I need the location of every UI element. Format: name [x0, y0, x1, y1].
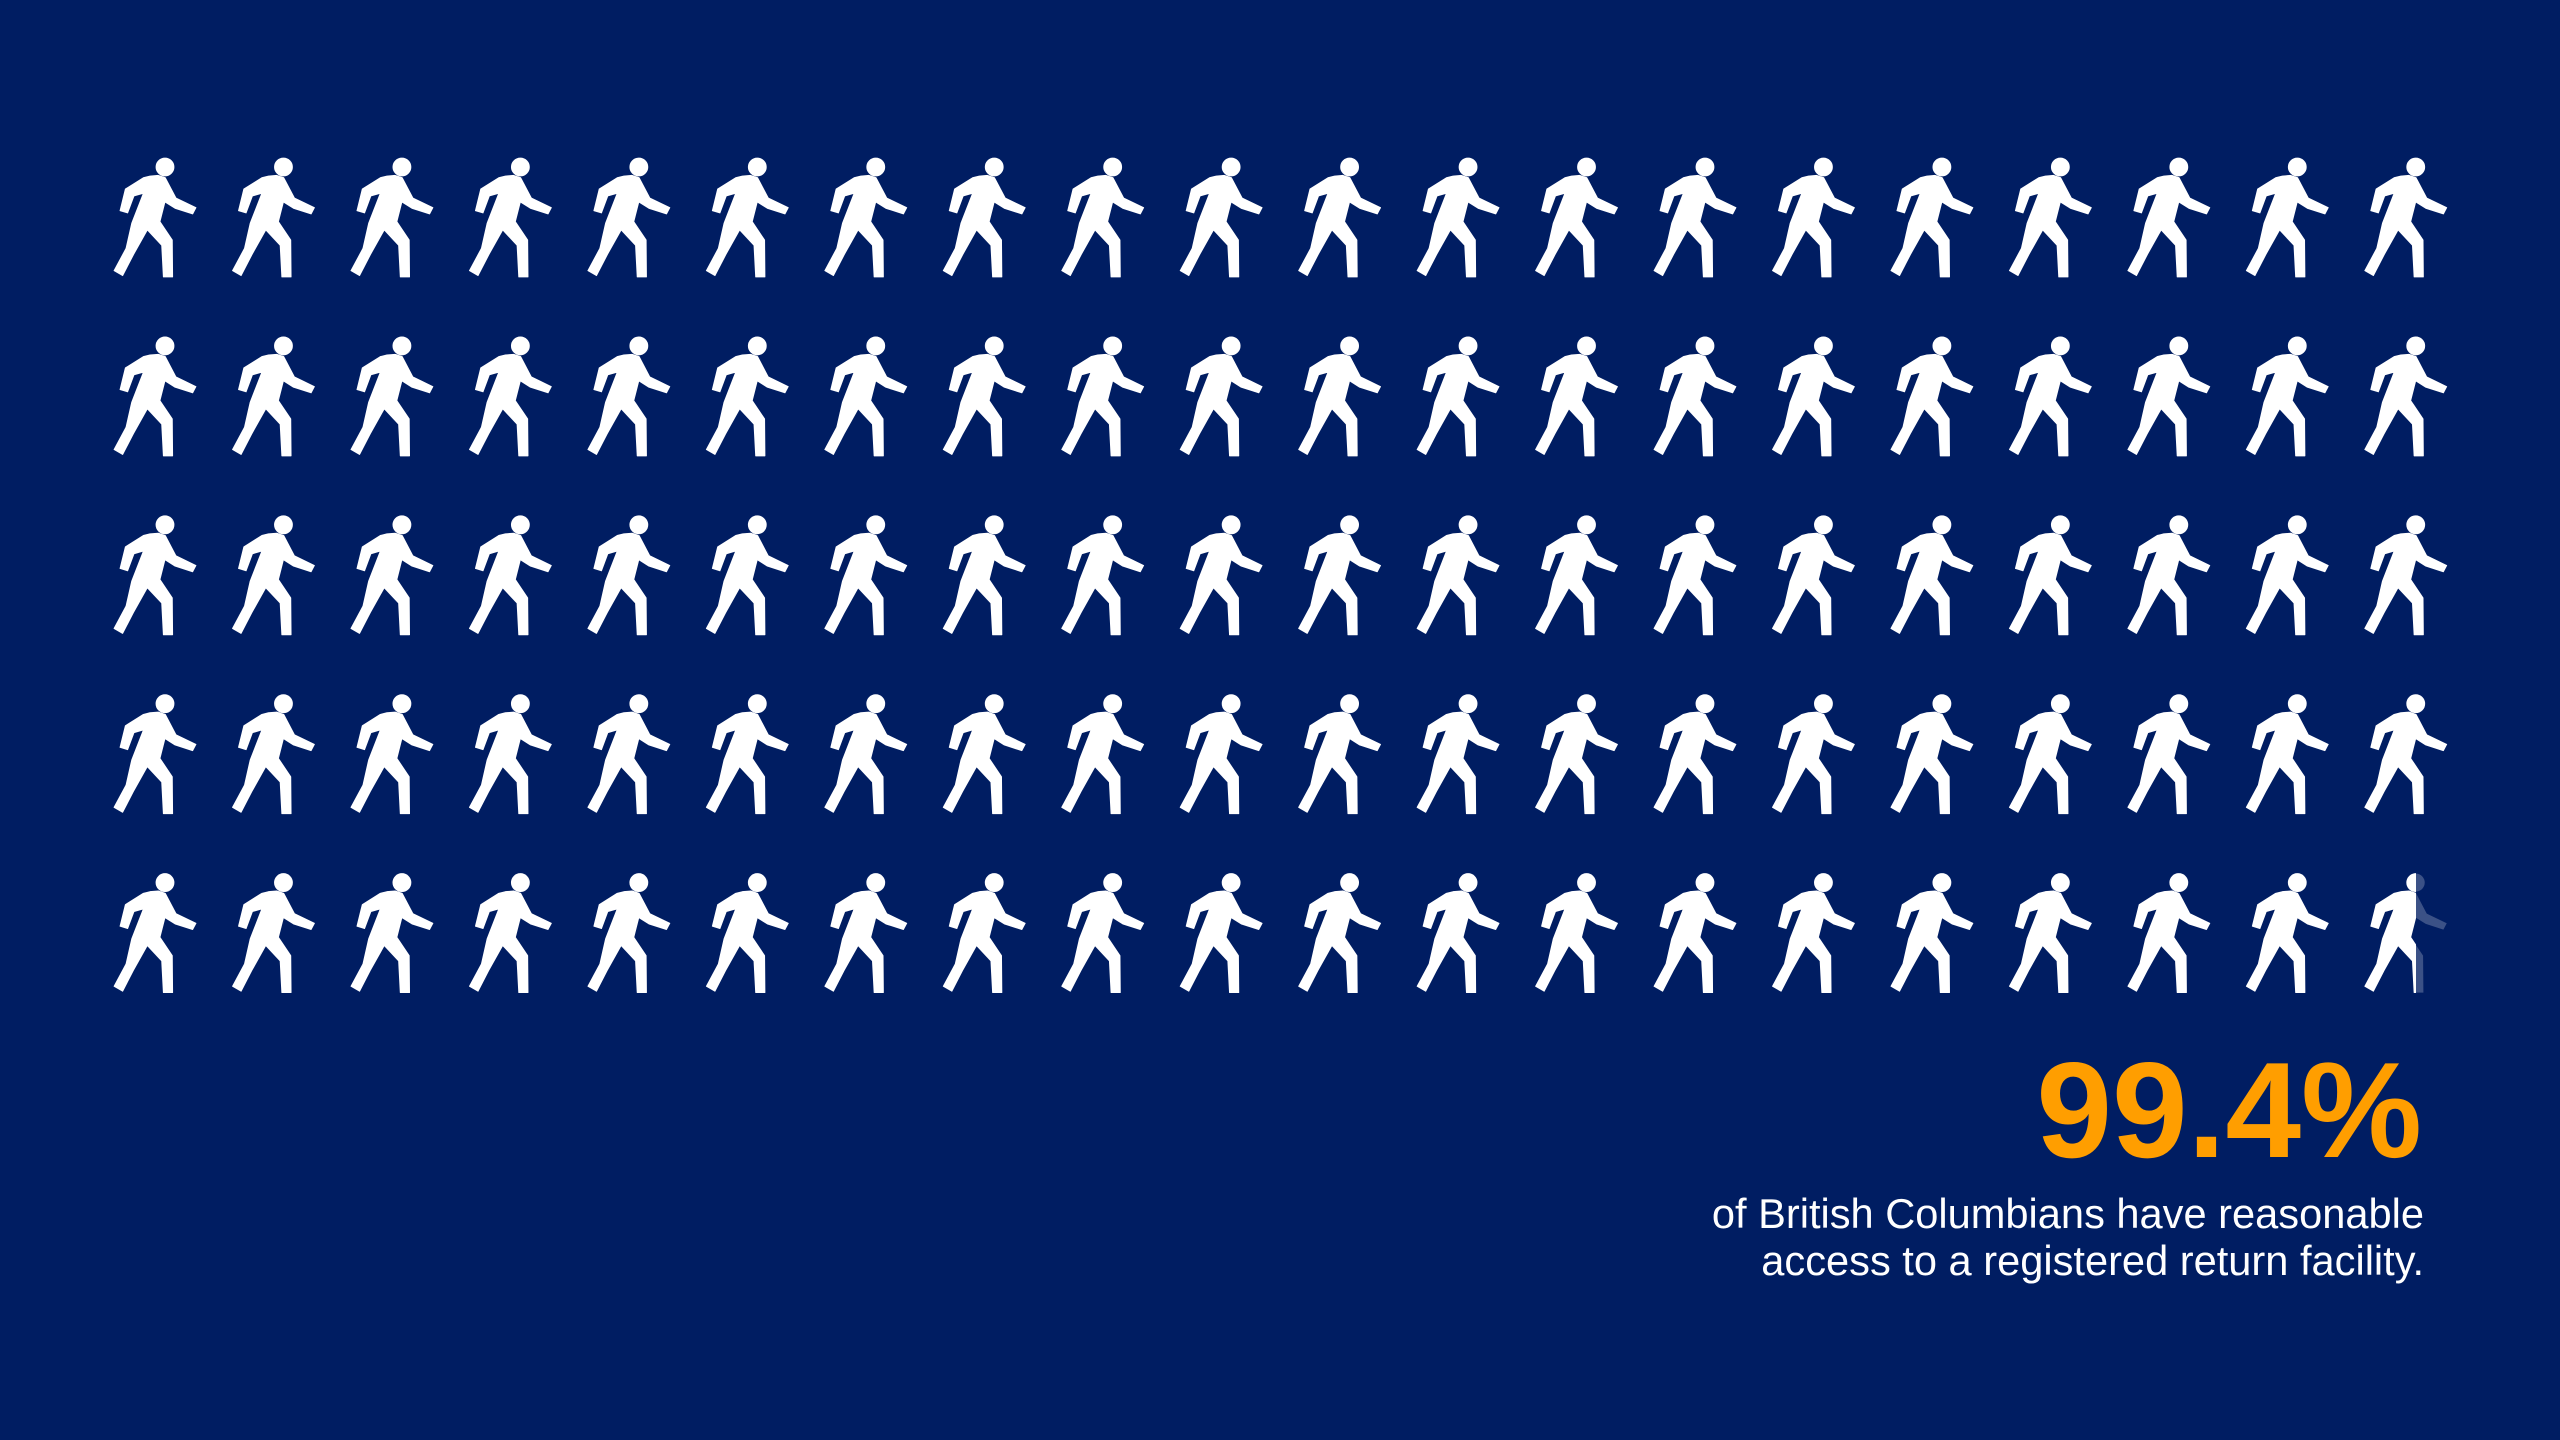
statistic: 99.4%: 99.4% [2036, 1034, 2422, 1186]
row 2 of walking people [114, 337, 2447, 456]
caption text [1712, 1190, 2424, 1284]
row 4 of walking people [114, 695, 2447, 814]
pictogram: rows of walking people [114, 158, 2447, 993]
row 1 of walking people [114, 158, 2447, 277]
icon: partially filled person [2365, 874, 2447, 993]
caption text: of British Columbians have reasonable [1712, 1190, 2424, 1237]
row 3 of walking people [114, 516, 2447, 635]
caption text: access to a registered return facility. [1761, 1237, 2424, 1284]
row 5 of walking people, last one partly filled [114, 874, 2447, 993]
